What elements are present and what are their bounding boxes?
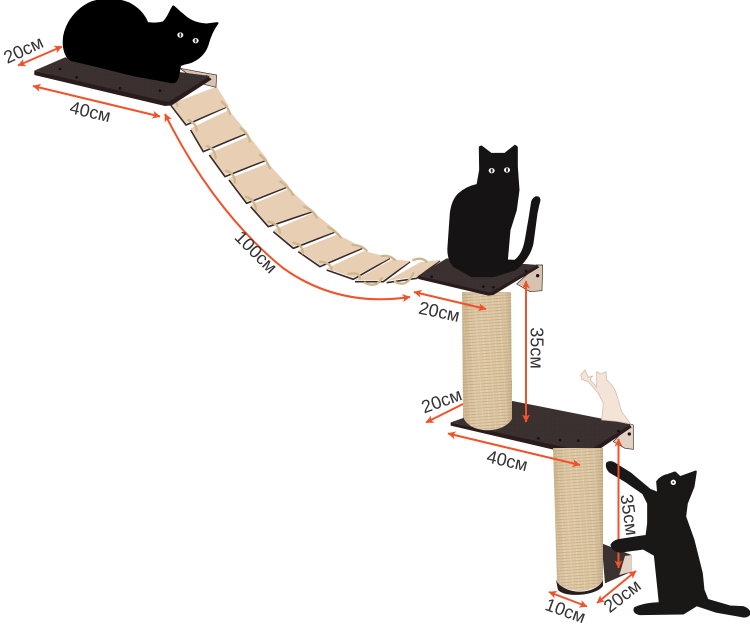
dimension labels: 100см <box>231 227 281 277</box>
black cat sitting on middle platform <box>449 146 539 276</box>
eye <box>671 480 676 485</box>
arrow segment passing over the cat's raised arm <box>618 445 620 538</box>
dimension labels: 20см <box>600 575 645 617</box>
small cream cat cutout <box>581 370 631 424</box>
sisal post 1 <box>462 292 512 430</box>
dimension labels: 20см <box>0 32 46 68</box>
platform 3 with bracket <box>451 401 633 457</box>
dimension arrows <box>18 46 636 606</box>
eyes <box>489 167 510 173</box>
dimension labels: 35см <box>616 493 642 537</box>
black cat lying on top platform <box>64 0 217 82</box>
black cat standing and reaching <box>607 462 749 616</box>
dimension labels: 35см <box>526 327 546 369</box>
dimension labels: 20см <box>419 384 464 417</box>
bottom bracket <box>602 543 632 583</box>
dimension labels: 20см <box>417 298 462 326</box>
platform 1 with bracket <box>34 57 217 106</box>
eyes <box>177 32 199 43</box>
dimension labels: 40см <box>485 446 530 475</box>
rope ladder bridge <box>168 87 441 285</box>
sisal post 1 lower end over platform 3 <box>463 380 512 430</box>
platform 2 with bracket <box>418 258 543 296</box>
dimension labels: 40см <box>68 97 113 126</box>
dimension labels: 10см <box>543 594 588 627</box>
sisal post 2 <box>553 448 603 595</box>
